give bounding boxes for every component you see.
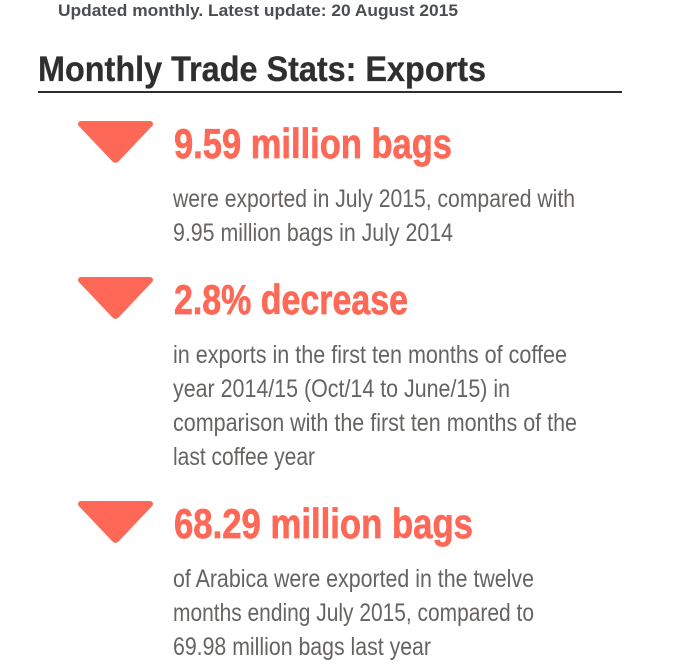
heading: 68.29 million bags: 68.29 million bags [174, 500, 473, 547]
description: 9.95 million bags in July 2014 [173, 219, 453, 247]
description: 69.98 million bags last year [173, 633, 431, 661]
stat: percentage decrease [78, 276, 577, 471]
heading: 2.8% decrease: 2.8% decrease [174, 276, 408, 323]
icon: down triangle [78, 277, 153, 319]
description: year 2014/15 (Oct/14 to June/15) in [173, 375, 510, 403]
description: last coffee year [173, 443, 315, 471]
stat: Arabica exports [78, 500, 534, 661]
icon: down triangle [78, 501, 153, 543]
description [173, 565, 534, 661]
description: of Arabica were exported in the twelve [173, 565, 534, 593]
stat: exports in July [78, 120, 575, 247]
description: in exports in the first ten months of coffee [173, 341, 567, 369]
icon: down triangle [78, 121, 153, 163]
description [173, 341, 577, 471]
title: Monthly Trade Stats: Exports [38, 50, 486, 89]
update note: Updated monthly. Latest update: 20 August 2015 [58, 1, 458, 20]
heading: 9.59 million bags: 9.59 million bags [174, 120, 452, 167]
description: months ending July 2015, compared to [173, 599, 534, 627]
description: comparison with the first ten months of the [173, 409, 577, 437]
description: were exported in July 2015, compared with [172, 185, 575, 213]
description [172, 185, 575, 247]
